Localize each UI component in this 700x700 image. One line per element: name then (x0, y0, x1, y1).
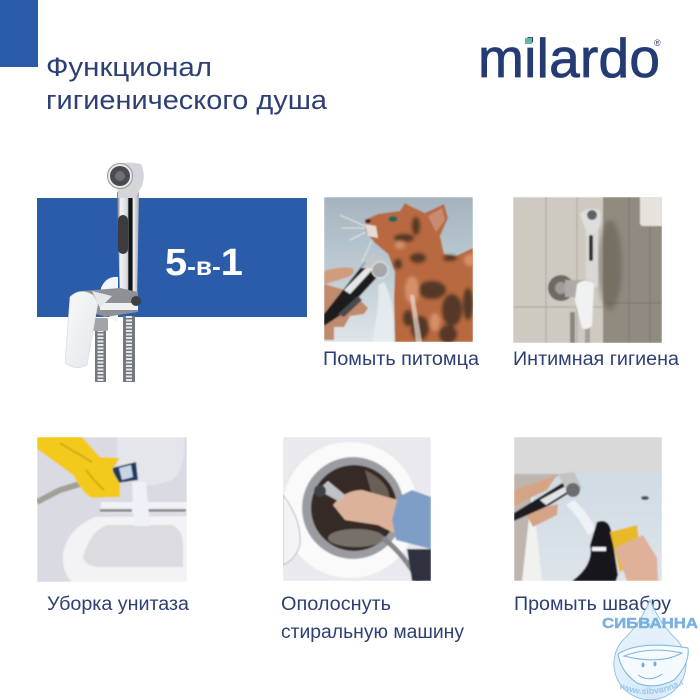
left hand lower fingers (525, 504, 558, 527)
corner accent block (0, 0, 38, 67)
water stream (132, 482, 150, 526)
toilet bowl (63, 516, 187, 582)
whiskers (340, 215, 372, 262)
shadow (598, 220, 622, 310)
hose right (123, 316, 135, 382)
gasket (302, 457, 404, 559)
mixer body (82, 288, 138, 317)
panel: 5-in-1 banner (37, 198, 307, 317)
caption: washing machine: стиральную машину (281, 622, 465, 643)
palm (324, 284, 368, 340)
caption: mop: Промыть швабру (514, 594, 672, 615)
cat eye (388, 216, 398, 222)
chrome plate (361, 254, 384, 268)
toilet lid (117, 437, 184, 485)
logo dot accent (525, 38, 532, 44)
cat muzzle (365, 224, 378, 238)
banner label: 5-в-1 (165, 242, 243, 284)
open door glass (283, 495, 300, 565)
bowl inner (83, 525, 183, 567)
caption: pet: Помыть питомца (323, 349, 479, 370)
rubber grip (118, 215, 128, 254)
logo: milardo: milardo (478, 27, 660, 89)
drum (311, 465, 397, 551)
tile lines (513, 197, 603, 343)
shirt sleeve (392, 490, 431, 549)
watermark face (638, 662, 662, 679)
photo: intimate hygiene (513, 197, 662, 343)
title: гигиенического душа (46, 85, 328, 115)
shower head (112, 462, 138, 483)
left hand upper fingers (514, 475, 557, 506)
dark wall panel (603, 197, 662, 343)
watermark url: www.sibvanna.ru (620, 680, 684, 694)
registered mark: ® (654, 38, 661, 48)
shower head (372, 262, 388, 278)
caption: intimate hygiene: Интимная гигиена (513, 349, 679, 370)
shower head (116, 162, 144, 198)
photo: rinsing mop (514, 437, 662, 581)
caption: washing machine (281, 594, 465, 643)
nut connector (93, 318, 108, 331)
washer door ring (282, 442, 418, 578)
shower handle (324, 262, 380, 326)
dark trousers (407, 549, 431, 581)
caption: washing machine: Ополоснуть (281, 594, 391, 615)
mixer disc (548, 275, 574, 301)
watermark bath (618, 645, 688, 686)
wall mount disc (100, 277, 118, 322)
photo: washing a pet (324, 197, 473, 342)
cat markings (394, 217, 476, 343)
tub wall left (514, 474, 562, 581)
flush pipes (101, 502, 187, 513)
title: Функционал (46, 52, 212, 82)
black mop (572, 521, 618, 581)
photo: cleaning toilet (37, 437, 187, 582)
hoses (570, 312, 575, 343)
product: shower and mixer (65, 162, 144, 382)
water (566, 500, 596, 535)
right hand (615, 535, 658, 581)
drain (641, 496, 649, 500)
watermark name: СИБВАННА (602, 615, 698, 632)
cat light chest stripe (410, 295, 422, 342)
shower handle (117, 192, 139, 304)
shower head (558, 472, 582, 497)
shower head (580, 209, 600, 233)
water stream (372, 282, 394, 342)
hose left (95, 330, 106, 382)
hose (383, 538, 419, 582)
flush plate (640, 190, 670, 226)
title (46, 52, 328, 115)
shower handle (514, 482, 574, 521)
yellow glove (37, 437, 120, 498)
shower handle (586, 227, 598, 287)
mixer lever (575, 280, 594, 329)
mixer lever (65, 291, 98, 368)
shower head (318, 481, 345, 502)
forearm and hand (333, 490, 398, 535)
cat ear inner (428, 208, 445, 232)
photo: rinsing washing machine (283, 437, 431, 581)
bathtub (530, 473, 662, 581)
hose (37, 484, 80, 502)
caption: toilet: Уборка унитаза (47, 594, 189, 615)
finger (324, 267, 354, 284)
yellow sponge (610, 525, 640, 573)
cat body (365, 203, 473, 342)
watermark drop (614, 600, 686, 700)
